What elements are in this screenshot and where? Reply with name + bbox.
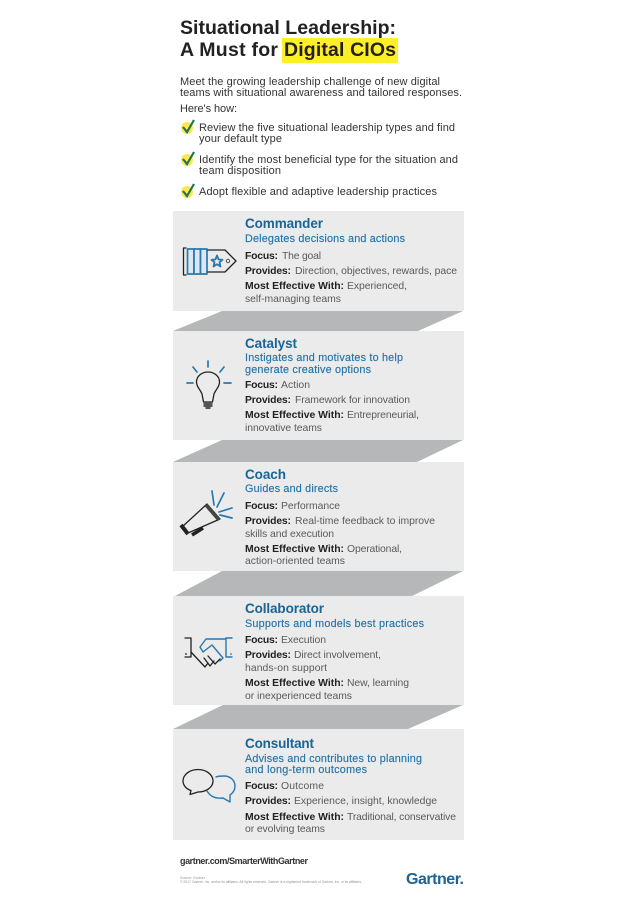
item 1: Review the five situational leadership types and find bbox=[199, 122, 455, 134]
subtitle: and long-term outcomes bbox=[245, 764, 368, 776]
subtitle bbox=[245, 753, 422, 776]
title: Digital CIOs bbox=[284, 39, 396, 61]
panel: Collaborator bbox=[173, 596, 464, 705]
details: Provides: bbox=[245, 266, 291, 277]
details: Focus: bbox=[245, 251, 278, 262]
icon: handshake bbox=[185, 638, 232, 667]
subtitle: Delegates decisions and actions bbox=[245, 233, 406, 245]
details: Framework for innovation bbox=[295, 395, 410, 406]
details: The goal bbox=[282, 251, 321, 262]
details: Operational, bbox=[347, 544, 402, 555]
checklist bbox=[181, 120, 458, 198]
heading: Catalyst bbox=[245, 336, 298, 351]
details: Provides: bbox=[245, 796, 291, 807]
heading: Coach bbox=[245, 467, 286, 482]
panel: Commander bbox=[173, 211, 464, 311]
item 1: your default type bbox=[199, 133, 282, 145]
icon: speech bubbles bbox=[183, 770, 235, 802]
subtitle bbox=[245, 352, 403, 376]
details: Entrepreneurial, bbox=[347, 410, 419, 421]
heading: Commander bbox=[245, 216, 324, 231]
item 3: Adopt flexible and adaptive leadership practices bbox=[199, 186, 438, 198]
details: Focus: bbox=[245, 380, 278, 391]
panel: Coach bbox=[173, 462, 464, 571]
details: Most Effective With: bbox=[245, 678, 344, 689]
fine print: Source: Gartner bbox=[180, 876, 206, 880]
details: hands-on support bbox=[245, 663, 327, 674]
icon: tag with bars and star bbox=[184, 248, 236, 275]
details: Most Effective With: bbox=[245, 410, 344, 421]
intro paragraph: teams with situational awareness and tailored responses. bbox=[180, 87, 462, 99]
details: action-oriented teams bbox=[245, 556, 345, 567]
details: Provides: bbox=[245, 395, 291, 406]
details: Most Effective With: bbox=[245, 544, 344, 555]
subtitle: Advises and contributes to planning bbox=[245, 753, 422, 765]
subtitle: Guides and directs bbox=[245, 483, 339, 495]
panel: Catalyst bbox=[173, 331, 464, 440]
details: Real-time feedback to improve bbox=[295, 516, 435, 527]
details bbox=[245, 251, 457, 305]
heading: Consultant bbox=[245, 736, 314, 751]
details: self-managing teams bbox=[245, 294, 341, 305]
panel: Consultant bbox=[173, 729, 464, 840]
details: Action bbox=[281, 380, 310, 391]
subtitle: Supports and models best practices bbox=[245, 618, 425, 630]
details: Direct involvement, bbox=[294, 650, 381, 661]
details: Provides: bbox=[245, 650, 291, 661]
fine print bbox=[180, 876, 362, 884]
intro paragraph: Meet the growing leadership challenge of new digital bbox=[180, 76, 440, 88]
fine print: © 2017 Gartner, Inc. and/or its affiliates. All rights reserved. Gartner is a registered trademark of Gartner, Inc. or its affiliates. bbox=[180, 880, 362, 884]
details: Experience, insight, knowledge bbox=[294, 796, 437, 807]
details bbox=[245, 781, 456, 835]
details: Provides: bbox=[245, 516, 291, 527]
details: Traditional, conservative bbox=[347, 812, 456, 823]
icon: light bulb bbox=[187, 361, 231, 409]
details: Most Effective With: bbox=[245, 281, 344, 292]
details: New, learning bbox=[347, 678, 409, 689]
item 2 bbox=[181, 152, 458, 177]
details: skills and execution bbox=[245, 529, 334, 540]
heading: Collaborator bbox=[245, 601, 325, 616]
subtitle: Instigates and motivates to help bbox=[245, 352, 403, 364]
subtitle: generate creative options bbox=[245, 364, 372, 376]
icon: megaphone bbox=[181, 491, 232, 535]
item 2: Identify the most beneficial type for the situation and bbox=[199, 154, 458, 166]
details: Focus: bbox=[245, 781, 278, 792]
details: Focus: bbox=[245, 501, 278, 512]
item 1 bbox=[181, 120, 455, 145]
details: or inexperienced teams bbox=[245, 691, 352, 702]
intro paragraph bbox=[180, 76, 462, 115]
details: Focus: bbox=[245, 635, 278, 646]
details: Most Effective With: bbox=[245, 812, 344, 823]
logo: Gartner: Gartner. bbox=[406, 871, 464, 888]
details: Outcome bbox=[281, 781, 324, 792]
title bbox=[180, 17, 398, 63]
details bbox=[245, 501, 435, 567]
details: Performance bbox=[281, 501, 340, 512]
connector bands bbox=[173, 311, 463, 729]
details: or evolving teams bbox=[245, 824, 325, 835]
details: innovative teams bbox=[245, 423, 322, 434]
title: Situational Leadership: bbox=[180, 17, 396, 39]
details: Experienced, bbox=[347, 281, 407, 292]
details bbox=[245, 635, 409, 702]
details: Direction, objectives, rewards, pace bbox=[295, 266, 457, 277]
intro paragraph: Here's how: bbox=[180, 103, 237, 115]
title: A Must for bbox=[180, 39, 278, 61]
details bbox=[245, 380, 419, 434]
details: Execution bbox=[281, 635, 326, 646]
item 2: team disposition bbox=[199, 165, 281, 177]
source link: gartner.com/SmarterWithGartner bbox=[180, 856, 308, 866]
